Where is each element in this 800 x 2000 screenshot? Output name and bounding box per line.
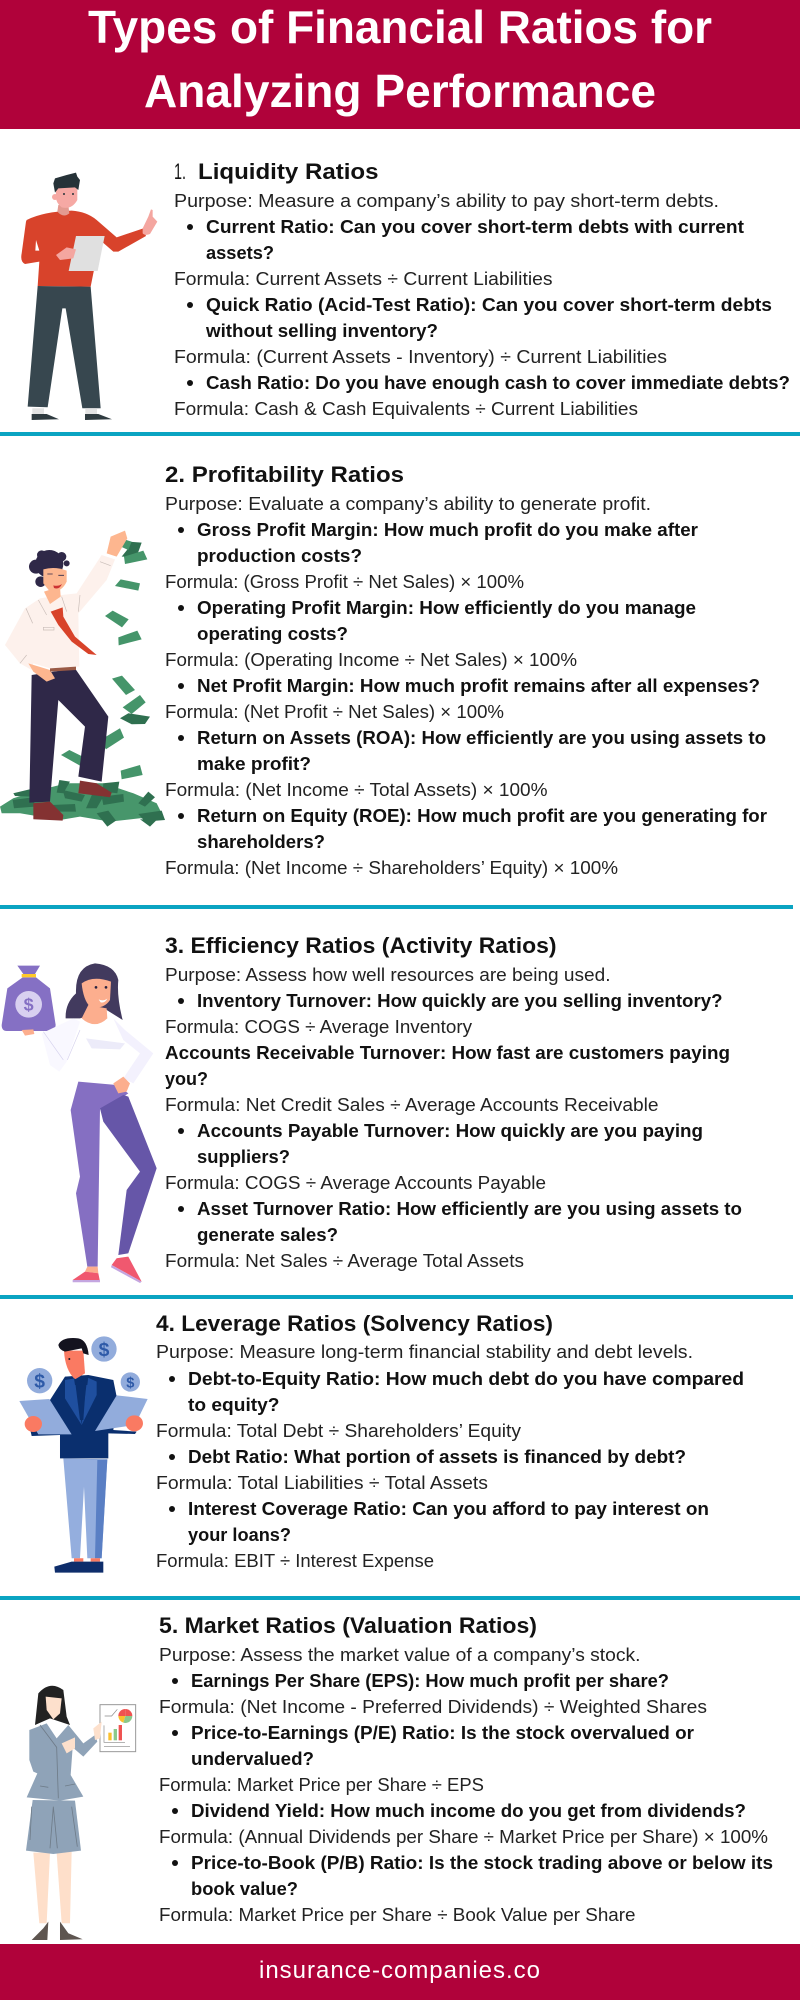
item: cash ratio: Formula: Cash & Cash Equivalents ÷ Current Liabilities [174,399,638,419]
item: asset turnover ratio [165,1199,742,1271]
item: inventory turnover [165,991,722,1037]
item: inventory turnover: Inventory Turnover: How quickly are you selling inventory? [197,991,722,1011]
item: return on equity: Formula: (Net Income ÷ Shareholders’ Equity) × 100% [165,858,618,878]
item: operating profit margin: Operating Profit Margin: How efficiently do you manage [197,598,696,618]
item: accounts receivable turnover: Accounts Receivable Turnover: How fast are customers paying [165,1043,730,1063]
title [88,1,712,117]
item: interest coverage ratio: Formula: EBIT ÷ Interest Expense [156,1551,434,1571]
footer banner [0,1944,800,2000]
panel: market ratios [26,1613,773,1940]
item: price-to-book ratio: Formula: Market Price per Share ÷ Book Value per Share [159,1905,636,1925]
item: asset turnover ratio: generate sales? [197,1225,338,1245]
item: accounts receivable turnover [165,1043,730,1115]
item: return on assets: make profit? [197,754,311,774]
heading: 1. [174,159,186,184]
item: dividend yield: Formula: (Annual Dividends per Share ÷ Market Price per Share) × 100% [159,1827,768,1847]
heading: Liquidity Ratios [198,159,378,184]
item: quick ratio [174,295,772,367]
item: return on equity: shareholders? [197,832,325,852]
item: price-to-earnings ratio: undervalued? [191,1749,314,1769]
item: earnings per share: Earnings Per Share (EPS): How much profit per share? [191,1671,669,1691]
purpose: Purpose: Measure a company’s ability to pay short-term debts. [174,191,719,211]
item: accounts payable turnover: Formula: COGS ÷ Average Accounts Payable [165,1173,546,1193]
footer url: insurance-companies.co [259,1957,540,1984]
illustration: man with clipboard [21,173,157,420]
purpose: Purpose: Assess how well resources are being used. [165,965,610,985]
item: debt-to-equity ratio: Formula: Total Debt ÷ Shareholders’ Equity [156,1421,521,1441]
item: accounts receivable turnover: Formula: Net Credit Sales ÷ Average Accounts Receivable [165,1095,658,1115]
item: debt-to-equity ratio: to equity? [188,1395,280,1415]
item: price-to-book ratio: book value? [191,1879,298,1899]
illustration: man in suit with documents: $ [126,1375,134,1391]
illustration: man throwing money [0,531,165,827]
item: asset turnover ratio: Formula: Net Sales ÷ Average Total Assets [165,1251,524,1271]
item: cash ratio [174,373,790,419]
item: accounts payable turnover: Accounts Payable Turnover: How quickly are you paying [197,1121,703,1141]
panel: efficiency ratios [2,933,742,1283]
item: gross profit margin: Formula: (Gross Profit ÷ Net Sales) × 100% [165,572,524,592]
purpose: Purpose: Assess the market value of a company’s stock. [159,1645,640,1665]
item: operating profit margin [165,598,696,670]
illustration: man in suit with documents: $ [34,1372,45,1393]
item: price-to-earnings ratio [159,1723,694,1795]
item: cash ratio: Cash Ratio: Do you have enough cash to cover immediate debts? [206,373,790,393]
item: debt-to-equity ratio [156,1369,744,1441]
purpose: Purpose: Evaluate a company’s ability to generate profit. [165,494,651,514]
heading: 3. Efficiency Ratios (Activity Ratios) [165,933,556,958]
item: quick ratio: without selling inventory? [205,321,438,341]
item: debt ratio: Formula: Total Liabilities ÷ Total Assets [156,1473,488,1493]
illustration: man in suit with documents [19,1336,148,1573]
item: net profit margin: Net Profit Margin: How much profit remains after all expenses? [197,676,760,696]
illustration: woman presenting chart [26,1686,136,1940]
purpose: Purpose: Measure long-term financial stability and debt levels. [156,1342,693,1362]
title: Analyzing Performance [144,65,656,117]
item: current ratio: Current Ratio: Can you cover short-term debts with current [206,217,744,237]
item: return on assets [165,728,766,800]
item: accounts receivable turnover: you? [165,1069,208,1089]
item: gross profit margin: production costs? [197,546,362,566]
heading: 2. Profitability Ratios [165,462,404,487]
heading: 4. Leverage Ratios (Solvency Ratios) [156,1311,553,1336]
item: asset turnover ratio: Asset Turnover Ratio: How efficiently are you using assets to [197,1199,742,1219]
item: quick ratio: Quick Ratio (Acid-Test Ratio): Can you cover short-term debts [206,295,772,315]
item: return on assets: Return on Assets (ROA): How efficiently are you using assets to [197,728,766,748]
item: debt-to-equity ratio: Debt-to-Equity Ratio: How much debt do you have compared [188,1369,744,1389]
item: price-to-earnings ratio: Formula: Market Price per Share ÷ EPS [159,1775,484,1795]
heading: 5. Market Ratios (Valuation Ratios) [159,1613,537,1638]
header banner [0,0,800,129]
item: net profit margin [165,676,760,722]
panel: liquidity ratios [21,159,790,420]
item: net profit margin: Formula: (Net Profit ÷ Net Sales) × 100% [165,702,504,722]
item: operating profit margin: Formula: (Operating Income ÷ Net Sales) × 100% [165,650,577,670]
item: dividend yield: Dividend Yield: How much income do you get from dividends? [191,1801,746,1821]
item: price-to-book ratio [159,1853,773,1925]
item: price-to-earnings ratio: Price-to-Earnings (P/E) Ratio: Is the stock overvalued or [191,1723,694,1743]
illustration: woman with money bag: $ [24,995,34,1015]
item: current ratio: assets? [206,243,274,263]
panel: leverage ratios [19,1311,744,1573]
item: current ratio [174,217,744,289]
item: earnings per share [159,1671,707,1717]
item: debt ratio [156,1447,686,1493]
item: accounts payable turnover [165,1121,703,1193]
item: return on equity [165,806,767,878]
illustration: woman with money bag [2,963,157,1283]
item: current ratio: Formula: Current Assets ÷ Current Liabilities [174,269,552,289]
item: price-to-book ratio: Price-to-Book (P/B) Ratio: Is the stock trading above or below its [191,1853,773,1873]
item: return on assets: Formula: (Net Income ÷ Total Assets) × 100% [165,780,548,800]
title: Types of Financial Ratios for [88,1,712,53]
illustration: man in suit with documents: $ [99,1340,110,1361]
item: gross profit margin [165,520,698,592]
item: interest coverage ratio: Interest Coverage Ratio: Can you afford to pay interest on [188,1499,709,1519]
item: operating profit margin: operating costs? [197,624,348,644]
item: quick ratio: Formula: (Current Assets - Inventory) ÷ Current Liabilities [174,347,667,367]
item: return on equity: Return on Equity (ROE): How much profit are you generating for [197,806,767,826]
item: interest coverage ratio: your loans? [188,1525,291,1545]
panel: profitability ratios [0,462,767,878]
item: earnings per share: Formula: (Net Income - Preferred Dividends) ÷ Weighted Shares [159,1697,707,1717]
item: accounts payable turnover: suppliers? [197,1147,290,1167]
item: interest coverage ratio [156,1499,709,1571]
item: debt ratio: Debt Ratio: What portion of assets is financed by debt? [188,1447,686,1467]
item: inventory turnover: Formula: COGS ÷ Average Inventory [165,1017,472,1037]
item: dividend yield [159,1801,768,1847]
item: gross profit margin: Gross Profit Margin: How much profit do you make after [197,520,698,540]
